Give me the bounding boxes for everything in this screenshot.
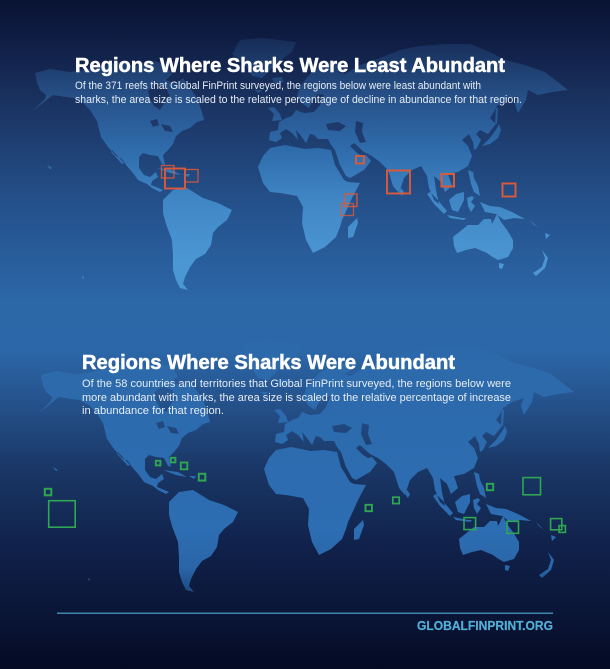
heading: abundant: Regions Where Sharks Were Abundant — [82, 352, 455, 374]
footer rule — [57, 613, 553, 614]
red squares: regions of decline — [162, 156, 516, 216]
panel: abundant regions — [45, 352, 565, 533]
text block: least abundant description: Of the 371 reefs that Global FinPrint surveyed, the regions below were least abundant with — [75, 80, 481, 92]
green squares: regions of increase — [45, 458, 565, 533]
bottom world map — [39, 340, 574, 592]
text block: abundant description: Of the 58 countries and territories that Global FinPrint surveyed, the regions below were — [82, 378, 511, 390]
footer url: GLOBALFINPRINT.ORG — [417, 619, 553, 633]
text block: abundant description: more abundant with sharks, the area size is scaled to the relative percentage of increase — [82, 392, 511, 404]
heading: least abundant: Regions Where Sharks Were Least Abundant — [75, 55, 505, 77]
text block: least abundant description: sharks, the area size is scaled to the relative percentage of decline in abundance for that region. — [75, 94, 522, 106]
top world map — [33, 38, 568, 290]
text block: least abundant description — [75, 80, 522, 106]
panel: least abundant regions — [75, 55, 522, 216]
text block: abundant description: in abundance for that region. — [82, 405, 224, 417]
text block: abundant description — [82, 378, 511, 417]
